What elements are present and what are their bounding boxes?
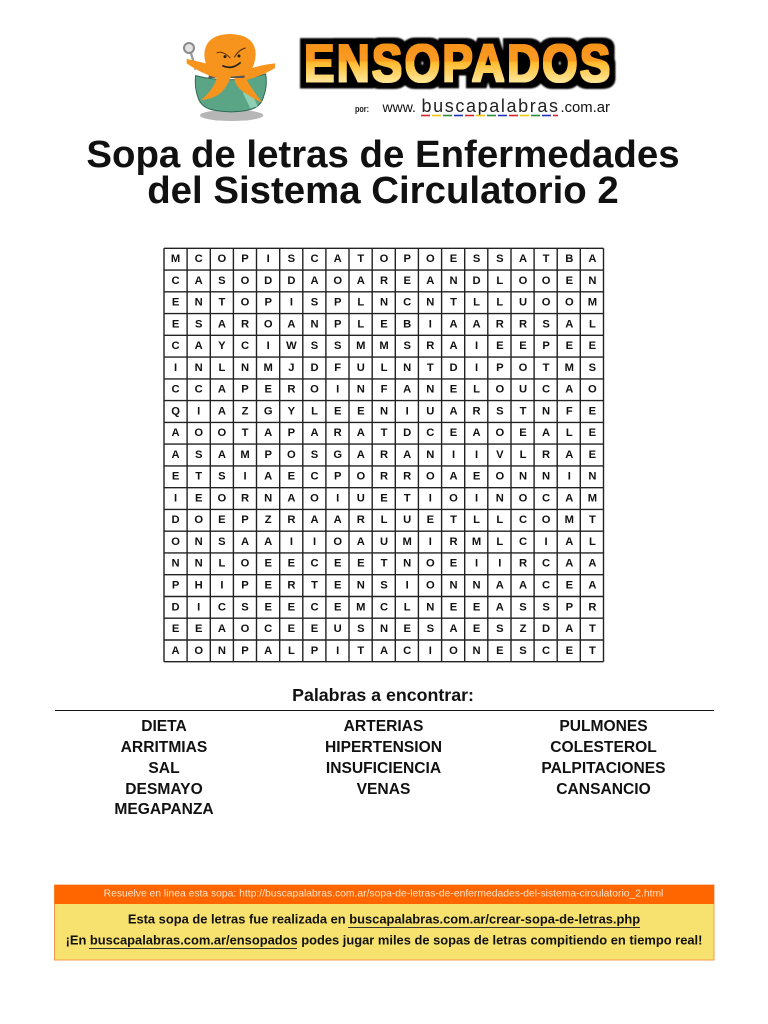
word list: column 3 (541, 718, 666, 798)
word list: column 1: MEGAPANZA (114, 801, 214, 818)
word list: column 1: DIETA (141, 718, 187, 735)
title (86, 133, 680, 212)
word search grid: DICSEECEMCLNEEASSPR (172, 601, 596, 613)
word list: column 3: PALPITACIONES (541, 760, 666, 777)
logo: ENSOPADOS wordmark: ENSOPADOS (304, 34, 613, 93)
logo byline: buscapalabras URL: .com.ar (560, 99, 610, 116)
word search grid: MCOPISCATOPOESSATBA (171, 253, 596, 265)
footer orange band with solve-online URL: Resuelve en linea esta sopa: http://buscapalabras.com.ar/sopa-de-letras-de-enfermedades-del-sistema-circulatorio_2.html (104, 888, 663, 900)
logo byline: buscapalabras URL: por: (355, 104, 369, 114)
word search grid: QIAZGYLEENIUARSTNFE (171, 405, 597, 417)
logo byline: buscapalabras URL: buscapalabras (422, 96, 558, 116)
word search grid: ETSIAECPORROAEONNIN (172, 471, 596, 483)
word search grid: AONPALPITACIONESCET (172, 645, 596, 657)
word list: column 1: ARRITMIAS (121, 739, 207, 756)
word search grid: IEORNAOIUETIOINOCAM (174, 493, 597, 505)
word search grid: ASAMPOSGARANIIVLRAE (172, 449, 597, 461)
footer panel (54, 885, 714, 960)
word search grid: ESAROANPLEBIAARRSAL (172, 318, 596, 330)
word search grid: NNLOEECEETNOEIIRCAA (172, 558, 596, 570)
word list: column 2: ARTERIAS (344, 718, 423, 735)
word search grid: CCAPEROINFANELOUCAO (172, 384, 597, 396)
footer orange band with solve-online URL (54, 885, 714, 904)
word list: column 3: PULMONES (559, 718, 648, 735)
word list: column 3: COLESTEROL (550, 739, 657, 756)
word list: column 2: VENAS (357, 781, 410, 798)
word list: column 1 (114, 718, 214, 818)
word search grid: PHIPERTENSIONNAACEA (172, 579, 596, 591)
word search grid: CASODDAOAREANDLOOEN (172, 275, 596, 287)
word search grid (164, 248, 604, 662)
word list: column 1: DESMAYO (125, 781, 203, 798)
word search grid: INLNMJDFULNTDIPOTMS (174, 362, 597, 374)
footer line: created with: Esta sopa de letras fue realizada en buscapalabras.com.ar/crear-sopa-de-letras.php (128, 912, 640, 926)
footer line: play online: ¡En buscapalabras.com.ar/ensopados podes jugar miles de sopas de letras compitiendo en tiempo real! (66, 932, 702, 948)
word list: column 2 (325, 718, 442, 798)
word list: column 2: HIPERTENSION (325, 739, 442, 756)
icon: octopus in pot mascot (184, 34, 275, 121)
heading: words to find: Palabras a encontrar: (292, 685, 474, 705)
logo byline: buscapalabras URL: www. (382, 99, 416, 115)
word search grid: ENTOPISPLNCNTLLUOOM (172, 297, 597, 309)
word search grid: ONSAAIIOAUMIRMLCIAL (171, 536, 596, 548)
word search grid: DOEPZRAARLUETLLCOMT (172, 514, 596, 526)
word list: column 1: SAL (148, 760, 180, 777)
title: Sopa de letras de Enfermedades (86, 133, 680, 176)
word search grid: EEAOCEEUSNESAESZDAT (172, 623, 596, 635)
word list: column 2: INSUFICIENCIA (326, 760, 441, 777)
word search grid: AOOTAPARATDCEAOEALE (172, 427, 597, 439)
logo byline: buscapalabras URL (355, 96, 610, 116)
word search grid: CAYCIWSSMMSRAIEEPEE (172, 340, 597, 352)
title: del Sistema Circulatorio 2 (147, 169, 619, 212)
word list: column 3: CANSANCIO (556, 781, 651, 798)
